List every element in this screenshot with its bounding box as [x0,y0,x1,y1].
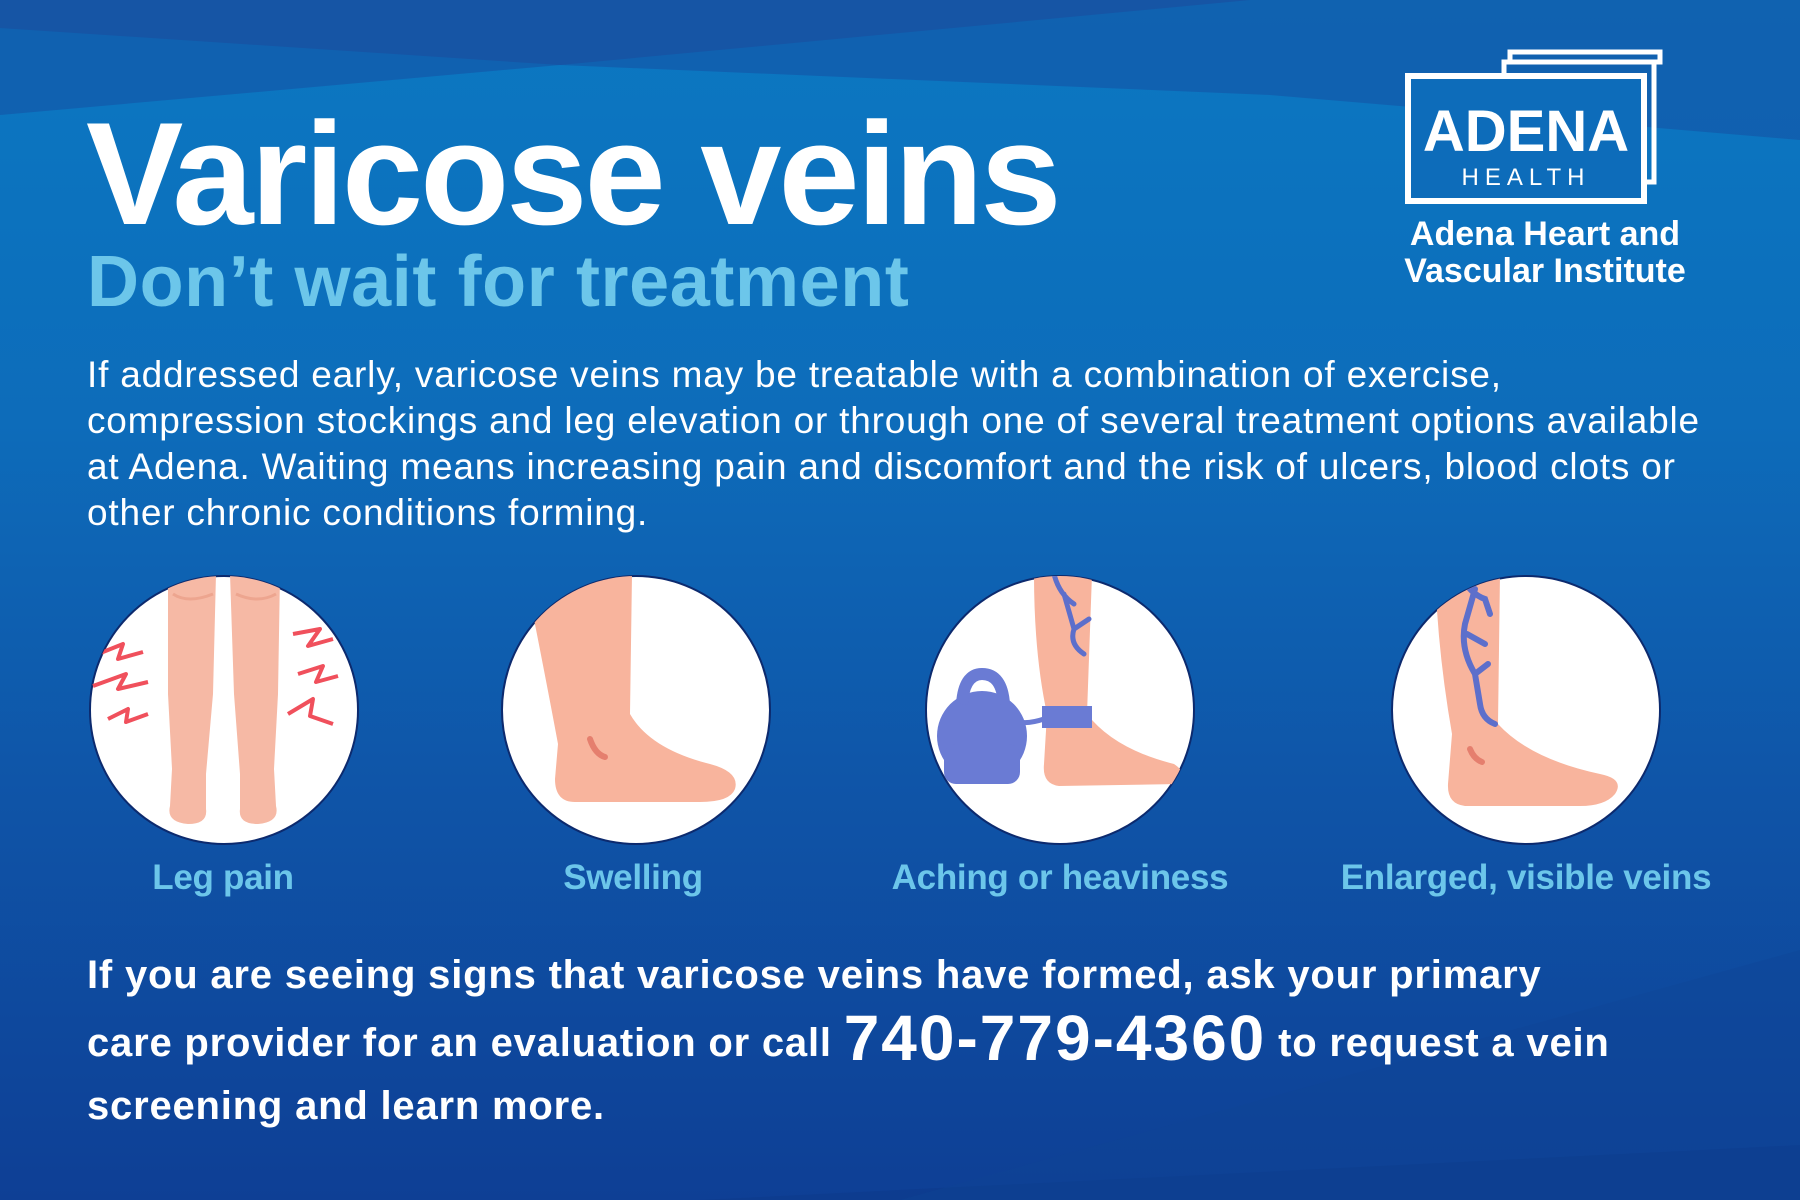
call to action: If you are seeing signs that varicose veins have formed, ask your primary [87,953,1542,997]
logo: HEALTH [1462,164,1590,191]
logo: Vascular Institute [1404,252,1686,290]
label: visible veins: Enlarged, visible veins [1341,858,1711,897]
label: leg pain: Leg pain [152,858,294,897]
intro paragraph: If addressed early, varicose veins may be treatable with a combination of exercise, [87,354,1502,395]
call to action [87,953,1610,1128]
intro paragraph: at Adena. Waiting means increasing pain and discomfort and the risk of ulcers, blood clots or [87,446,1676,487]
icon: leg pain [89,575,359,845]
intro paragraph: compression stockings and leg elevation or through one of several treatment options available [87,400,1700,441]
label: swelling: Swelling [563,858,703,897]
logo [1404,50,1686,290]
intro paragraph [87,354,1700,533]
title: Varicose veins [86,92,1059,255]
label: aching: Aching or heaviness [892,858,1228,897]
subtitle: Don’t wait for treatment [87,242,909,322]
logo: ADENA [1423,99,1629,164]
icon: swelling [501,575,771,845]
call to action: screening and learn more. [87,1084,605,1128]
icon: visible veins [1391,575,1661,845]
intro paragraph: other chronic conditions forming. [87,492,648,533]
logo: Adena Heart and [1410,215,1680,253]
call to action: care provider for an evaluation or call 740-779-4360 to request a vein [87,1002,1610,1074]
icon: aching [925,575,1195,845]
